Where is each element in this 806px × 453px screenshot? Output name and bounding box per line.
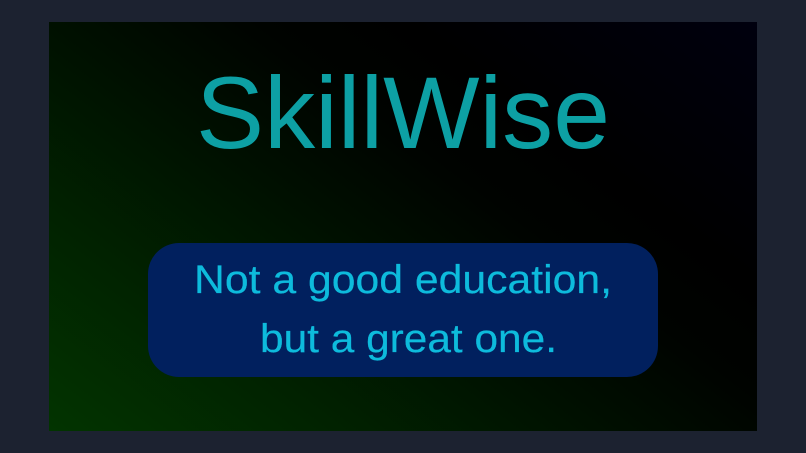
tagline text line 1: Not a good education,	[194, 258, 612, 302]
panel: tagline	[148, 243, 658, 377]
title: SkillWise	[196, 56, 610, 170]
tagline text line 2: but a great one.	[260, 317, 557, 361]
panel: gradient background	[49, 22, 757, 431]
tagline background pill	[148, 243, 658, 377]
